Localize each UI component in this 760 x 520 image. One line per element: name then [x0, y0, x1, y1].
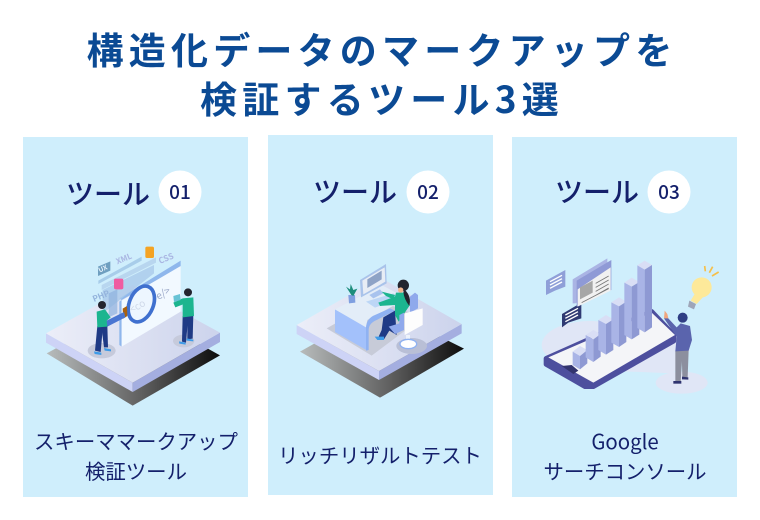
illustration: code inspection: e/>	[152, 282, 173, 303]
label: tool 2: リッチリザルトテスト	[278, 439, 482, 469]
illustration: person at computer	[297, 264, 464, 398]
lightbulb	[688, 266, 719, 309]
heading: tool 2: ツール	[313, 171, 397, 211]
heading: tool 1: ツール	[66, 173, 150, 213]
illustration: code inspection: CSS	[157, 250, 175, 267]
label: tool 3	[543, 425, 707, 485]
illustration: code inspection: <co	[126, 295, 148, 316]
title: 構造化データのマークアップを	[87, 21, 677, 75]
label: tool 3: Google	[591, 425, 659, 455]
illustration: code inspection	[46, 247, 220, 406]
panel: tool 1	[23, 137, 248, 497]
title: 検証するツール3選	[200, 70, 564, 124]
panel: tool 3	[512, 137, 737, 497]
heading: tool 3: ツール	[555, 171, 639, 211]
heading: tool 1	[66, 170, 202, 214]
chat bubbles	[546, 270, 581, 327]
title	[87, 21, 677, 124]
heading: tool 3	[555, 170, 690, 214]
heading: tool 2: 02	[417, 178, 439, 205]
illustration: code inspection: PHP	[91, 287, 112, 305]
bars	[573, 261, 652, 369]
heading: tool 2	[313, 170, 450, 214]
illustration: code inspection: XML	[114, 251, 134, 267]
illustration: code inspection: UX	[96, 261, 110, 274]
heading: tool 1: 01	[169, 178, 191, 205]
label: tool 3: サーチコンソール	[543, 455, 707, 485]
label: tool 1: 検証ツール	[85, 455, 187, 485]
web page card	[573, 258, 611, 307]
heading: tool 3: 03	[658, 178, 680, 205]
person	[664, 311, 692, 384]
label: tool 1	[34, 425, 239, 485]
illustration: analytics on smartphone	[542, 258, 719, 394]
panel: tool 2	[268, 135, 493, 495]
label: tool 1: スキーママークアップ	[34, 425, 239, 455]
